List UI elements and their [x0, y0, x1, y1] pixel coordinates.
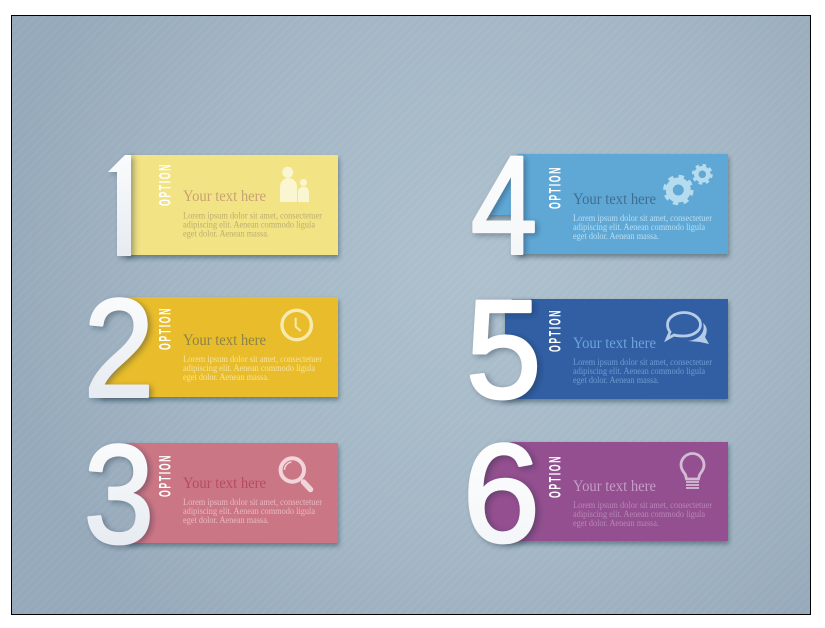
numeral 2: 2 — [84, 270, 154, 427]
heading 5: Your text here — [573, 335, 656, 352]
numeral 6: 6 — [463, 415, 540, 572]
body 2: adipiscing elit. Aenean commodo ligula — [183, 363, 315, 373]
heading 4: Your text here — [573, 191, 656, 208]
body 4: eget dolor. Aenean massa. — [573, 231, 659, 241]
body 4 — [573, 213, 712, 241]
panel: option 6 — [463, 415, 728, 572]
heading 3: Your text here — [183, 475, 266, 492]
option label 5: OPTION — [546, 309, 564, 352]
body 5: eget dolor. Aenean massa. — [573, 375, 659, 385]
heading 1: Your text here — [183, 188, 266, 205]
body 1: Lorem ipsum dolor sit amet, consectetuer — [183, 210, 322, 220]
option label 3: OPTION — [156, 454, 174, 497]
icon: gears — [665, 166, 711, 203]
heading 2: Your text here — [183, 332, 266, 349]
card 4 background — [484, 154, 728, 254]
icon: magnifier — [281, 458, 310, 490]
heading 6: Your text here — [573, 478, 656, 495]
panel: option 5 — [466, 272, 728, 428]
body 5 — [573, 357, 712, 385]
icon: people — [280, 167, 309, 202]
body 4: Lorem ipsum dolor sit amet, consectetuer — [573, 213, 712, 223]
numeral 3: 3 — [84, 416, 154, 573]
numeral 5: 5 — [466, 272, 541, 428]
icon: speech bubbles — [667, 312, 709, 344]
body 3: eget dolor. Aenean massa. — [183, 515, 269, 525]
panel: option 4 — [471, 126, 728, 284]
body 2: eget dolor. Aenean massa. — [183, 372, 269, 382]
body 2: Lorem ipsum dolor sit amet, consectetuer — [183, 354, 322, 364]
body 2 — [183, 354, 322, 382]
body 6: adipiscing elit. Aenean commodo ligula — [573, 509, 705, 519]
body 6 — [573, 500, 712, 528]
option label 1: OPTION — [156, 163, 174, 206]
body 1: eget dolor. Aenean massa. — [183, 228, 269, 238]
card 2 background — [100, 297, 338, 397]
card 6 background — [477, 442, 728, 541]
body 1 — [183, 210, 322, 238]
panel: option 2 — [84, 270, 338, 427]
numeral 4: 4 — [471, 126, 537, 284]
option label 2: OPTION — [156, 307, 174, 350]
body 3: adipiscing elit. Aenean commodo ligula — [183, 506, 315, 516]
body 5: Lorem ipsum dolor sit amet, consectetuer — [573, 357, 712, 367]
body 1: adipiscing elit. Aenean commodo ligula — [183, 220, 315, 230]
panel: option 3 — [84, 416, 338, 573]
body 6: Lorem ipsum dolor sit amet, consectetuer — [573, 500, 712, 510]
option label 6: OPTION — [546, 455, 564, 498]
body 3 — [183, 497, 322, 525]
body 6: eget dolor. Aenean massa. — [573, 518, 659, 528]
body 4: adipiscing elit. Aenean commodo ligula — [573, 222, 705, 232]
numeral 1: 1 — [88, 128, 156, 284]
body 3: Lorem ipsum dolor sit amet, consectetuer — [183, 497, 322, 507]
option label 4: OPTION — [546, 166, 564, 209]
card 3 background — [126, 443, 338, 543]
body 5: adipiscing elit. Aenean commodo ligula — [573, 366, 705, 376]
panel: option 1 — [108, 154, 342, 262]
card 5 background — [500, 299, 728, 399]
numeral 1 — [108, 154, 138, 262]
icon: light bulb — [681, 454, 704, 488]
icon: clock — [282, 310, 311, 340]
card 1 background — [125, 155, 338, 255]
